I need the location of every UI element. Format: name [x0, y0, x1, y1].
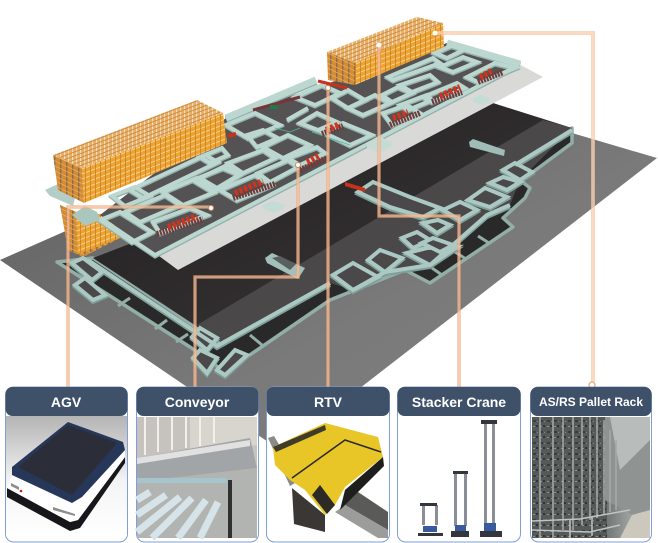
Stacker Crane header [398, 387, 520, 416]
RTV photo [268, 423, 388, 538]
left slab end glass [45, 184, 100, 226]
AS/RS Pallet Rack header [530, 387, 652, 416]
lower rack section under slab [60, 205, 120, 257]
callout line: AGV [68, 206, 214, 388]
stacker crane illustrations [418, 420, 502, 537]
conveyor photo [137, 417, 257, 538]
panel: AGV [6, 387, 128, 542]
callout line: RTV [326, 86, 330, 388]
panel: Conveyor [136, 387, 258, 542]
top floor walkways [100, 43, 520, 256]
third level structure [57, 128, 572, 372]
glass box near conveyor line [265, 253, 305, 279]
pallet rack photo [532, 417, 650, 538]
top concrete slab [155, 62, 543, 270]
cyan floor markings [275, 128, 350, 145]
AGV header [6, 387, 128, 416]
right orange pallet rack [327, 17, 444, 85]
ground plane [0, 83, 657, 450]
RTV header: RTV [314, 394, 343, 410]
top floor dark area [100, 43, 515, 253]
AGV photo [6, 416, 127, 536]
panel: RTV [266, 387, 390, 542]
glass box on second level [469, 139, 505, 156]
callout line: Stacker Crane [376, 42, 459, 388]
AS/RS Pallet Rack header: AS/RS Pallet Rack [539, 395, 643, 409]
Stacker Crane header: Stacker Crane [412, 394, 506, 410]
Conveyor header: Conveyor [165, 394, 230, 410]
red conveyor stations [157, 70, 503, 234]
callout line: AS/RS Pallet Rack [432, 30, 595, 388]
panel: AS/RS Pallet Rack [530, 387, 652, 542]
panel: Stacker Crane [398, 387, 520, 542]
RTV header [266, 387, 390, 416]
second level floor [93, 103, 572, 343]
left orange pallet rack [53, 100, 227, 203]
AGV header: AGV [51, 394, 82, 410]
Conveyor header [136, 387, 258, 416]
glass boxes on concrete [263, 95, 490, 213]
callout line: Conveyor [195, 162, 300, 388]
red equipment on second level [345, 182, 365, 192]
second level walkways [72, 130, 572, 377]
